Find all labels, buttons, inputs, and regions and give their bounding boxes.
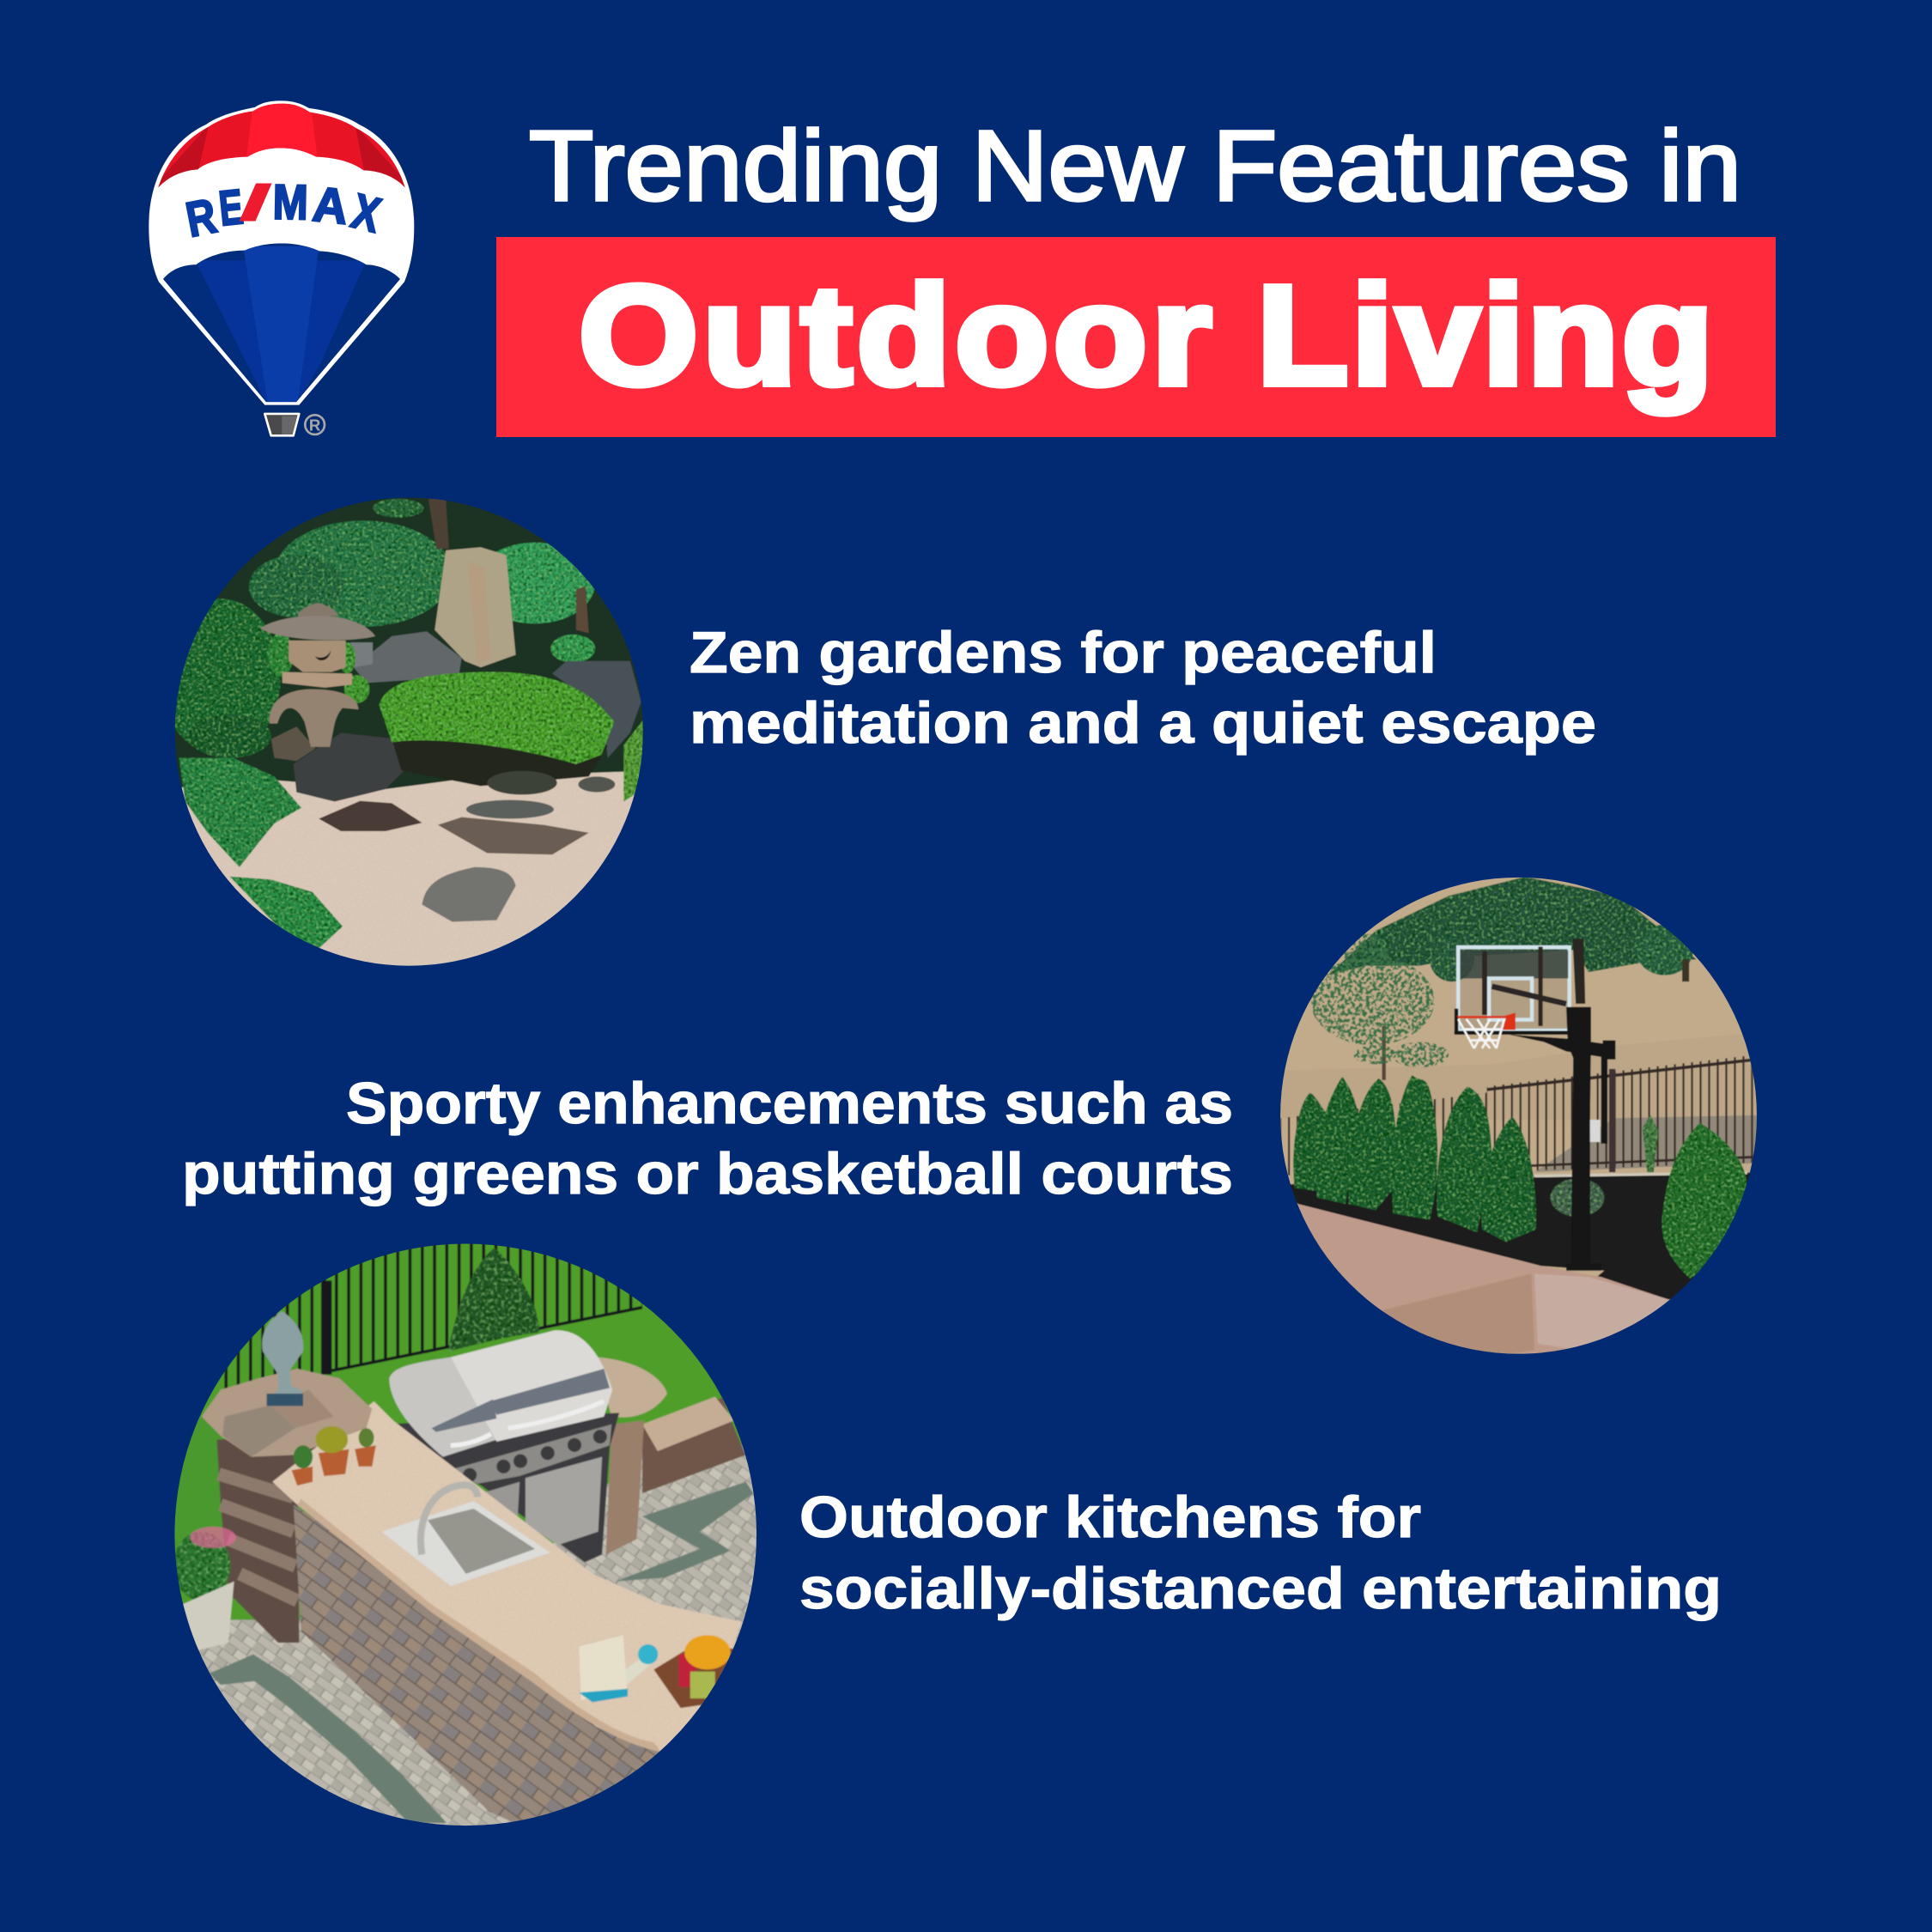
photo: basketball court: [1271, 867, 1769, 1365]
text: outdoor kitchens: [799, 1485, 1722, 1621]
balloon basket: [264, 414, 299, 435]
balloon wordmark: M: [272, 175, 308, 230]
balloon wordmark: [182, 175, 386, 248]
photo: zen garden: [175, 498, 643, 966]
balloon blue bottom: [161, 240, 404, 404]
fence: [216, 1236, 642, 1390]
net: [1458, 1019, 1504, 1048]
lantern: [262, 1311, 303, 1406]
sink: [381, 1485, 550, 1586]
gravel behind fence: [1534, 1115, 1769, 1172]
text: outdoor kitchens: Outdoor kitchens for: [799, 1485, 1421, 1550]
paver accent bands: [210, 1482, 753, 1823]
banner heading: [579, 257, 1713, 414]
text: sporty enhancements: putting greens or basketball courts: [182, 1141, 1233, 1206]
backboard: [1455, 939, 1585, 1035]
rim: [1456, 1012, 1516, 1030]
flower planter: [173, 1527, 236, 1650]
clipped bush: [380, 671, 614, 764]
paving: [163, 1443, 764, 1838]
text: sporty enhancements: Sporty enhancements such as: [346, 1071, 1233, 1136]
balloon envelope outline: [149, 100, 414, 405]
side shelf: [596, 1358, 667, 1418]
low shrub: [1551, 1179, 1604, 1217]
fence: [1280, 1054, 1757, 1176]
brick pier behind grill: [606, 1420, 644, 1555]
stepping stones: [319, 771, 615, 921]
banner background: [496, 237, 1776, 437]
grill hood: [389, 1358, 496, 1457]
logo: RE/MAX balloon: [149, 100, 421, 435]
text: outdoor kitchens: socially-distanced entertaining: [799, 1556, 1722, 1621]
garden backdrop: [175, 498, 643, 790]
concrete court: [1271, 1204, 1668, 1365]
grill: [384, 1330, 619, 1562]
balloon wordmark: /: [240, 175, 271, 230]
banner heading: Living: [1257, 257, 1713, 414]
hoop: [1455, 939, 1615, 1271]
lawn: [163, 1236, 764, 1619]
registered mark: R: [309, 416, 321, 434]
title banner: [496, 237, 1776, 437]
tree line: [1328, 877, 1697, 981]
brick wall: [294, 1504, 669, 1838]
balloon wordmark: X: [346, 185, 386, 244]
text: zen gardens: [690, 620, 1596, 756]
balloon wordmark: R: [182, 189, 221, 248]
dark rocks: [294, 733, 404, 802]
countertop: [272, 1401, 742, 1752]
grey boulders: [354, 631, 462, 683]
basket of flowers: [653, 1635, 734, 1708]
pine foliage: [249, 499, 595, 663]
bush shadow: [392, 739, 608, 786]
flower pots: [292, 1426, 376, 1485]
mulch bed: [1290, 1172, 1750, 1300]
arborvitae row: [1293, 1075, 1747, 1279]
column cap: [202, 1369, 372, 1457]
tree trunk: [428, 499, 449, 549]
standing stone: [434, 547, 516, 667]
balloon wordmark: A: [310, 177, 350, 235]
grill doors: [526, 1457, 602, 1545]
text: sporty enhancements: [182, 1071, 1233, 1206]
low wall: [642, 1397, 746, 1493]
brick column: [216, 1432, 355, 1643]
title line: Trending New Features in: [529, 110, 1741, 222]
sand: [182, 771, 635, 966]
young tree: [1310, 934, 1449, 1080]
left shrub: [160, 598, 369, 758]
grill base: [384, 1413, 619, 1562]
balloon wordmark: E: [216, 179, 246, 236]
text: zen gardens: Zen gardens for peaceful: [690, 620, 1437, 685]
text: zen gardens: meditation and a quiet escape: [690, 690, 1596, 756]
foreground leaves: [179, 720, 643, 951]
conifer: [449, 1248, 539, 1352]
tree trunk: [1682, 959, 1689, 981]
watering can: [579, 1635, 658, 1702]
banner heading: Outdoor: [579, 258, 1212, 414]
left lawn: [163, 1405, 224, 1555]
photo: outdoor kitchen: [163, 1236, 764, 1838]
registered mark: [305, 415, 325, 434]
lantern: [260, 603, 375, 747]
grill knob panel: [449, 1425, 611, 1484]
balloon red top: [158, 103, 405, 187]
pole: [1509, 1007, 1615, 1271]
dry hillside: [1280, 878, 1757, 1305]
